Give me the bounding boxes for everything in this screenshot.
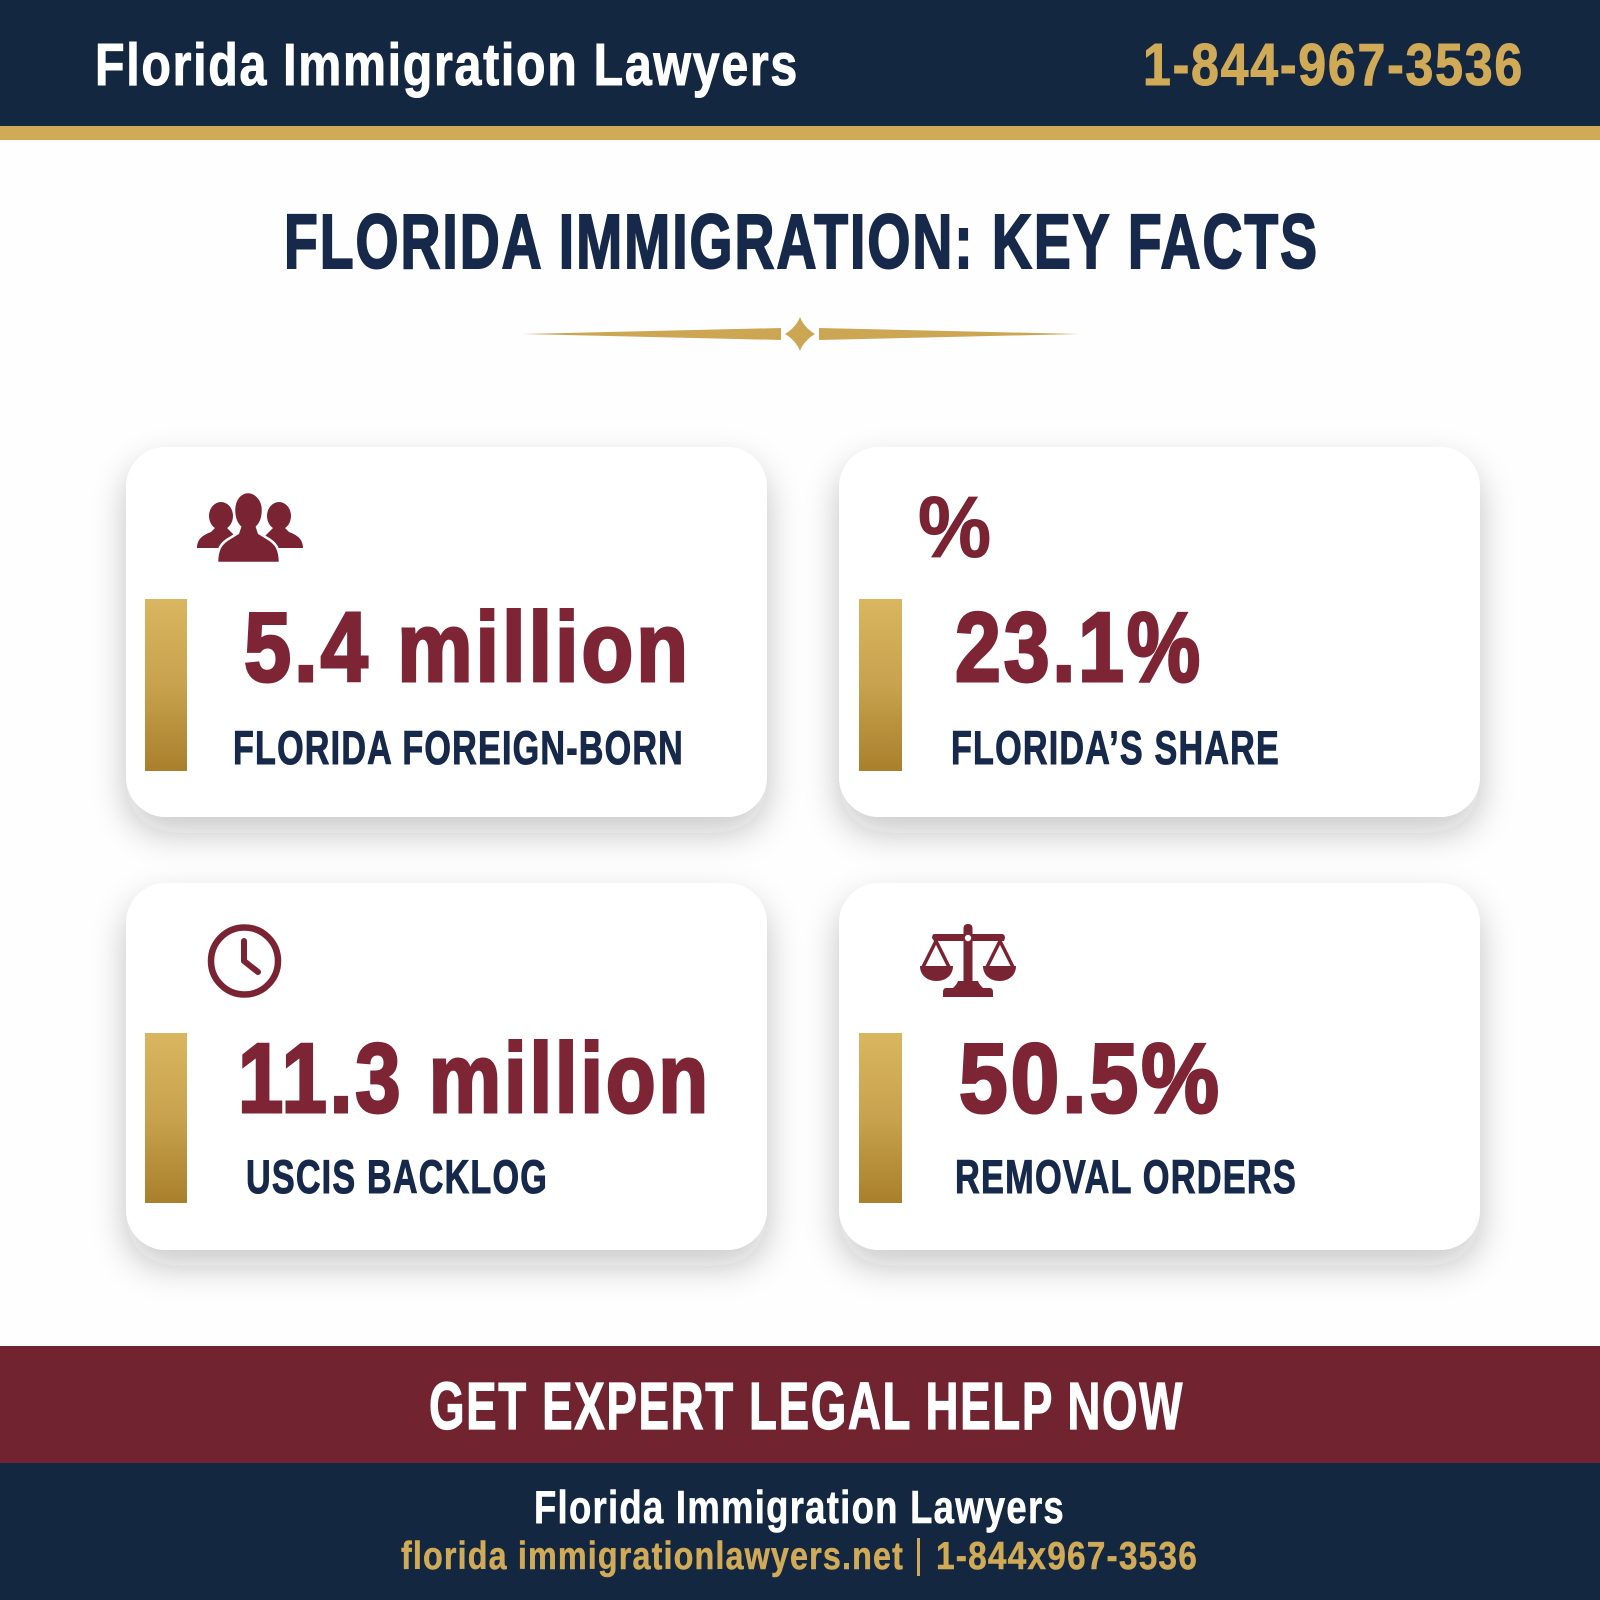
panel: Florida's share [839, 447, 1480, 817]
footer band [0, 1463, 1600, 1600]
statistic label: FLORIDA’S SHARE [951, 721, 1280, 774]
gold accent bar [145, 1033, 187, 1203]
panel: USCIS backlog [126, 883, 767, 1250]
icon: people group [197, 492, 303, 563]
panel: Florida foreign-born [126, 447, 767, 817]
statistic label: FLORIDA FOREIGN-BORN [233, 721, 684, 774]
statistic value: 23.1% [955, 592, 1203, 702]
footer firm name: Florida Immigration Lawyers [534, 1481, 1065, 1533]
statistic value: 11.3 million [238, 1023, 711, 1133]
icon: scales of justice [920, 924, 1016, 997]
icon: clock [211, 928, 278, 994]
footer phone number: 1-844x967-3536 [936, 1535, 1198, 1578]
statistic value: 50.5% [959, 1023, 1222, 1133]
footer separator [917, 1538, 920, 1576]
call-to-action text: GET EXPERT LEGAL HELP NOW [429, 1369, 1184, 1444]
gold accent bar [859, 1033, 902, 1203]
statistic value: 5.4 million [244, 592, 691, 702]
footer website: florida immigrationlawyers.net [401, 1535, 904, 1578]
panel: removal orders [839, 883, 1480, 1250]
statistic label: REMOVAL ORDERS [955, 1150, 1297, 1203]
header firm name: Florida Immigration Lawyers [95, 32, 799, 98]
gold accent bar [145, 599, 187, 771]
title divider ornament [523, 317, 1079, 351]
statistic label: USCIS BACKLOG [246, 1150, 548, 1203]
header phone number: 1-844-967-3536 [1143, 32, 1524, 98]
call-to-action banner [0, 1346, 1600, 1464]
icon: percent sign: % [918, 480, 994, 576]
header band [0, 0, 1600, 140]
gold accent bar [859, 599, 902, 771]
